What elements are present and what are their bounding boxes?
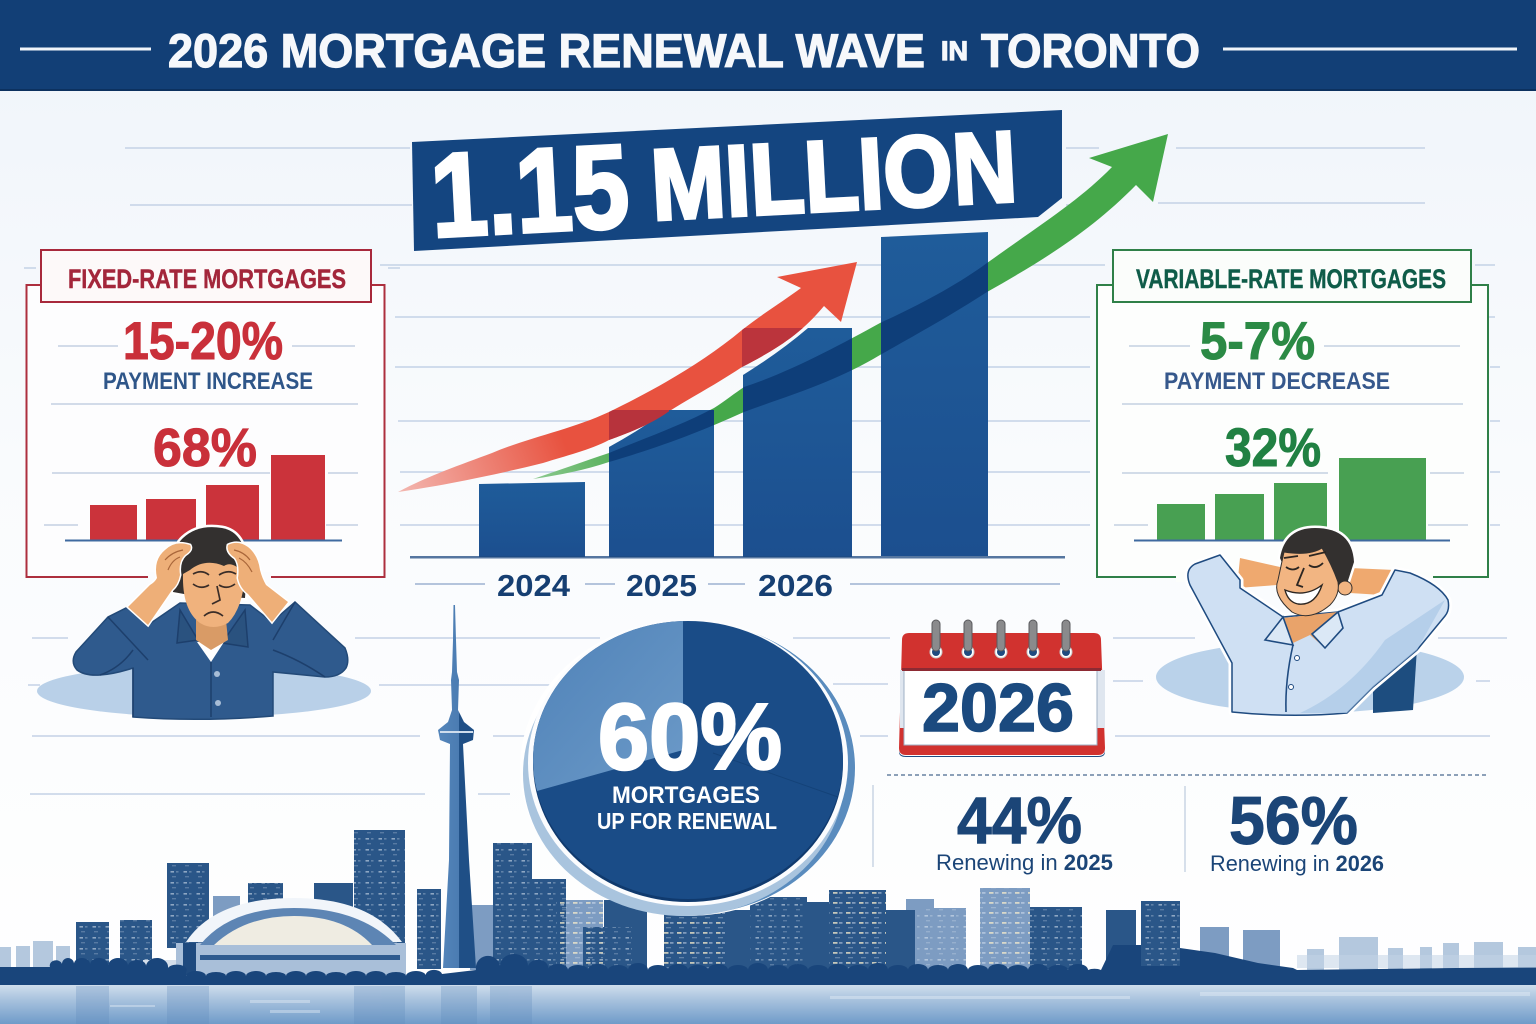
pie dark slice: [533, 621, 843, 899]
panel label: VARIABLE-RATE MORTGAGES: [1136, 264, 1446, 294]
arrow: green rising: [533, 134, 1168, 479]
stat: 56 percent renewing in 2026: [1210, 783, 1384, 876]
headline banner: 1.15 million: [412, 110, 1062, 263]
pie chart: 60 percent: [520, 620, 856, 916]
icon: calendar 2026: [899, 620, 1105, 757]
pie text: 60%: [598, 684, 782, 789]
panel: fixed-rate mortgages: [26, 250, 384, 577]
calendar rings: [930, 620, 1072, 658]
axis labels: [497, 568, 833, 603]
panel: variable-rate mortgages: [1097, 250, 1488, 577]
stat: payment increase: PAYMENT INCREASE: [103, 368, 313, 395]
title text: TORONTO: [981, 24, 1200, 77]
icon: worried man: [37, 527, 371, 719]
stat: payment decrease: PAYMENT DECREASE: [1164, 368, 1390, 395]
water: [0, 985, 1536, 1024]
landmark: stadium dome: [143, 898, 406, 975]
stat: 44 percent renewing in 2025: 44%: [957, 783, 1082, 857]
bar: second: [609, 410, 714, 557]
title banner: [0, 0, 1536, 91]
stat: 32 percent: 32%: [1225, 418, 1321, 478]
downtown buildings: [76, 830, 1180, 971]
bar: fourth: [881, 232, 988, 556]
stat: 56 percent renewing in 2026: Renewing in 2026: [1210, 851, 1384, 876]
red mini bar chart: [65, 455, 342, 542]
stat: payment decrease: 5-7%: [1200, 312, 1315, 371]
icon: relaxed man: [1156, 528, 1464, 715]
growth chart with arrows: [398, 134, 1168, 603]
trees and shore: [0, 945, 1536, 985]
stat: 44 percent renewing in 2025: [936, 783, 1113, 875]
icon: calendar 2026: 2026: [922, 670, 1074, 746]
panel label: FIXED-RATE MORTGAGES: [68, 264, 346, 294]
headline banner: 1.15 million: 1.15: [427, 120, 632, 263]
pie text: UP FOR RENEWAL: [597, 808, 777, 834]
axis labels: 2026: [758, 568, 833, 603]
panel label: [1113, 250, 1471, 302]
axis labels: 2024: [497, 568, 571, 603]
panel label: [41, 250, 371, 302]
landmark: CN Tower: [438, 605, 476, 968]
stat: payment increase: [103, 312, 313, 395]
pie text: [597, 684, 782, 834]
title text: 2026 MORTGAGE RENEWAL WAVE: [168, 24, 925, 77]
axis labels: 2025: [626, 568, 697, 603]
stat: payment increase: 15-20%: [123, 312, 283, 371]
city skyline: [0, 605, 1536, 1024]
bar: first: [479, 482, 585, 557]
pie text: MORTGAGES: [612, 782, 760, 809]
pie light slice: [533, 621, 683, 791]
stat: 56 percent renewing in 2026: 56%: [1229, 783, 1358, 859]
stat: payment decrease: [1164, 312, 1390, 395]
distant buildings: [0, 937, 1536, 972]
stat: 44 percent renewing in 2025: Renewing in 2025: [936, 850, 1113, 875]
headline banner: 1.15 million: MILLION: [648, 111, 1020, 242]
arrow: red rising: [398, 262, 857, 492]
stat: 68 percent: 68%: [153, 418, 257, 478]
title text: IN: [941, 36, 968, 66]
bar: third: [743, 328, 852, 557]
green mini bar chart: [1134, 458, 1450, 542]
